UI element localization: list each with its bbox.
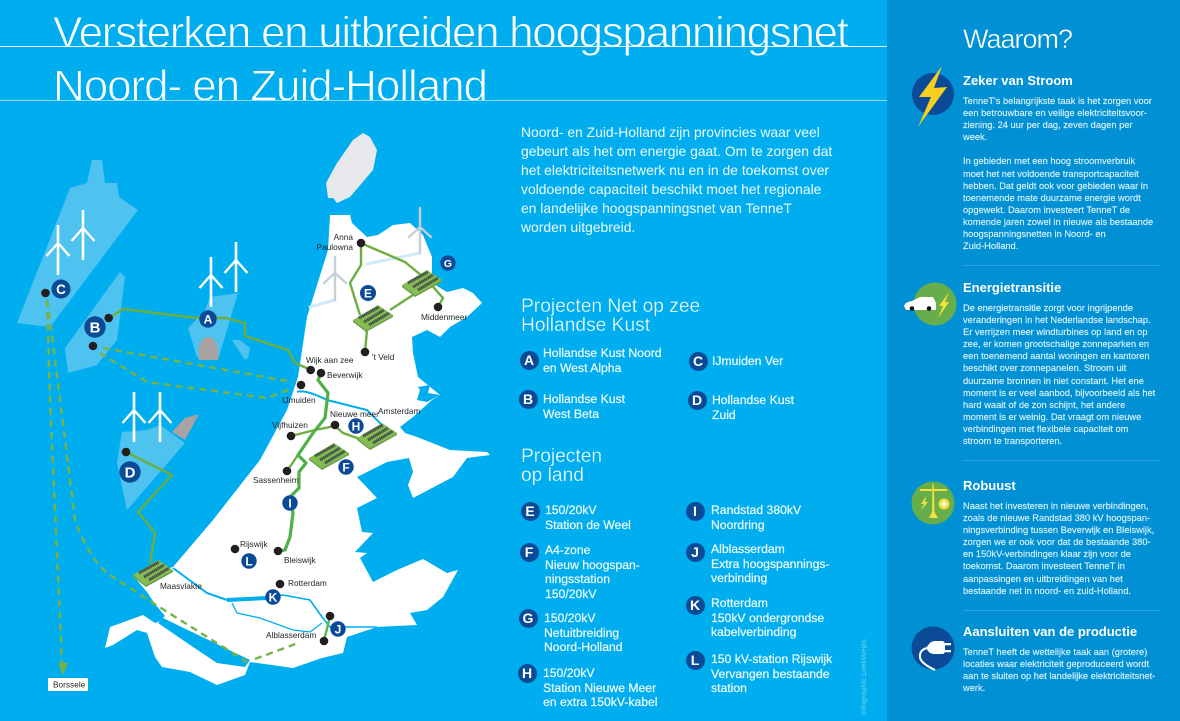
legend: land projects: Alblasserdam	[711, 542, 785, 556]
legend: land projects: Rotterdam	[711, 596, 768, 610]
legend: offshore projects: D	[692, 392, 702, 408]
text: aan te sluiten op het landelijke elektriciteitsnet-	[963, 671, 1155, 681]
text: verbindingen met flexibele capaciteit om	[963, 424, 1128, 434]
reserved grey zones	[172, 337, 218, 440]
map place labels: IJmuiden	[282, 395, 316, 405]
icon: car	[904, 282, 956, 326]
legend: offshore projects: B	[523, 390, 533, 406]
map place labels: Nieuwe meer	[330, 409, 379, 419]
text: hebben. Dat geldt ook voor gebieden waar in	[963, 181, 1148, 191]
heading: projecten net op zee	[521, 296, 700, 336]
legend: offshore projects: Hollandse Kust Noord	[543, 346, 662, 360]
legend: offshore projects: A	[524, 352, 534, 368]
island: Texel	[326, 133, 377, 203]
text: stroom te transporteren.	[963, 436, 1062, 446]
map place labels: 't Veld	[372, 352, 395, 362]
map place labels: Rotterdam	[288, 578, 327, 588]
map place labels	[160, 232, 467, 640]
map place labels: Beverwijk	[327, 370, 363, 380]
text: Energietransitie	[963, 280, 1061, 295]
map badges: D	[125, 464, 136, 482]
water: lake and estuary	[158, 385, 440, 667]
text: Zuid-Holland.	[963, 241, 1018, 251]
legend: offshore projects: West Beta	[543, 406, 599, 420]
map badges: F	[342, 460, 350, 474]
intro text: en landelijke hoogspanningsnet van TenneT	[521, 200, 792, 216]
map place labels: Sassenheim	[253, 475, 299, 485]
legend: land projects: 150 kV-station Rijswijk	[711, 652, 832, 666]
legend: offshore projects: IJmuiden Ver	[712, 354, 783, 368]
section: zeker van stroom	[962, 73, 1153, 251]
intro text: het elektriciteitsnetwerk nu en in de toekomst over	[521, 162, 829, 178]
legend: land projects: Randstad 380kV	[711, 503, 801, 517]
map badges: I	[288, 496, 292, 510]
map place labels: Rijswijk	[240, 539, 269, 549]
intro text: voldoende capaciteit beschikt moet het regionale	[521, 180, 821, 196]
text: moet het net voldoende transportcapaciteit	[963, 169, 1139, 179]
text: hard waait of de zon schijnt, het andere	[963, 400, 1125, 410]
text: aanpassingen en uitbreidingen van het	[963, 574, 1123, 584]
text: Zeker van Stroom	[963, 73, 1073, 88]
dashed cables	[47, 300, 298, 664]
map badges: A	[204, 312, 213, 326]
text: locaties waar elektriciteit geproduceerd wordt	[963, 659, 1149, 669]
text: opgewekt. Daarom investeert TenneT de	[963, 205, 1130, 215]
heading: waarom: Waarom?	[963, 24, 1072, 54]
map badges: K	[269, 590, 278, 604]
map badges: G	[444, 258, 452, 270]
text: hoogspanningsnetten in Noord- en	[963, 229, 1106, 239]
legend: land projects: Noordring	[711, 518, 765, 532]
legend: land projects: en extra 150kV-kabel	[543, 695, 658, 709]
map place labels: Middenmeer	[421, 312, 467, 322]
legend: land projects: Station de Weel	[545, 518, 631, 532]
label: Borssele: Borssele	[53, 680, 86, 690]
legend: land projects: Netuitbreiding	[544, 626, 619, 640]
text: veranderingen in het Nederlandse landschap.	[963, 315, 1151, 325]
legend: land projects: ningsstation	[545, 572, 610, 586]
map place labels: Anna	[334, 232, 353, 242]
legend: land projects: 150/20kV	[545, 503, 596, 517]
offshore zones	[17, 160, 250, 510]
text: TenneT's belangrijkste taak is het zorgen voor	[963, 96, 1152, 106]
legend: offshore projects: Hollandse Kust	[543, 392, 625, 406]
solid cables	[109, 243, 443, 641]
legend: land projects: kabelverbinding	[711, 625, 796, 639]
intro text: Noord- en Zuid-Holland zijn provincies waar veel	[521, 124, 820, 140]
heading: projecten net op zee: Hollandse Kust	[521, 315, 650, 336]
intro text: worden uitgebreid.	[521, 218, 635, 234]
map badges: J	[335, 622, 341, 636]
legend: offshore projects: Hollandse Kust	[712, 393, 794, 407]
text: bestaande net in noord- en zuid-Holland.	[963, 586, 1131, 596]
text: en 150kV-verbindingen klaar zijn voor de	[963, 549, 1131, 559]
legend: land projects: A4-zone	[545, 543, 590, 557]
legend: land projects: L	[691, 652, 699, 668]
map badges: H	[352, 420, 360, 434]
map place labels: Vijfhuizen	[272, 420, 308, 430]
text: moment is er veel aanbod, bijvoorbeeld als het	[963, 388, 1155, 398]
Randstad cable	[278, 373, 328, 551]
land-based turbines	[310, 208, 431, 307]
legend: land projects: G	[523, 610, 533, 626]
map badges: B	[90, 320, 101, 336]
legend: land projects: Vervangen bestaande	[711, 666, 830, 680]
legend: land projects: 150/20kV	[545, 586, 596, 600]
text: zorgen we er ook voor dat de bestaande 380-	[963, 537, 1151, 547]
panel: waarom background	[887, 0, 1180, 721]
text: Robuust	[963, 478, 1016, 493]
text: Naast het investeren in nieuwe verbindingen,	[963, 501, 1149, 511]
title: Noord- en Zuid-Holland	[53, 62, 488, 110]
heading: projecten net op zee: Projecten Net op zee	[521, 296, 700, 317]
heading: projecten op land: op land	[521, 465, 584, 486]
text: een betrouwbare en veilige elektriciteitsvoor-	[963, 108, 1147, 118]
heading: projecten op land	[521, 446, 602, 486]
legend: land projects: H	[522, 664, 532, 680]
text: De energietransitie zorgt voor ingrijpende	[963, 303, 1133, 313]
text: ziening. 24 uur per dag, zeven dagen per	[963, 120, 1133, 130]
map place labels: Bleiswijk	[284, 555, 317, 565]
arrow to Borssele	[58, 663, 68, 675]
map place labels: Maasvlakte	[160, 581, 202, 591]
legend: land projects: K	[690, 596, 700, 612]
legend: land projects: Noord-Holland	[544, 640, 623, 654]
text: toekomst. Daarom investeert TenneT in	[963, 561, 1125, 571]
water: rivers and canals	[173, 391, 382, 632]
section: robuust	[963, 478, 1154, 596]
text: zoals de nieuwe Randstad 380 kV hoogspan-	[963, 513, 1150, 523]
credit: Infographic LoekWeijts	[859, 639, 868, 715]
text: een toenemend aantal woningen en kantoren	[963, 351, 1150, 361]
text: duurzame bronnen in niet constant. Het ene	[963, 376, 1144, 386]
offshore turbines	[46, 210, 248, 442]
legend: offshore projects: C	[693, 352, 703, 368]
legend: land projects: verbinding	[711, 571, 767, 585]
map place labels: Alblasserdam	[266, 630, 316, 640]
legend: offshore projects: Zuid	[712, 408, 736, 422]
legend: land projects: I	[693, 502, 697, 518]
section: energietransitie	[962, 280, 1156, 446]
heading: projecten op land: Projecten	[521, 446, 602, 467]
text: TenneT heeft de wettelijke taak aan (grotere)	[963, 647, 1147, 657]
map badges: L	[245, 554, 253, 568]
text: komende jaren zowel in nieuwe als bestaande	[963, 217, 1153, 227]
text: beschikt over zonnepanelen. Stroom uit	[963, 363, 1126, 373]
land: Noord- en Zuid-Holland	[105, 215, 490, 685]
title: Versterken en uitbreiden hoogspanningsnet	[53, 8, 849, 57]
legend: land projects: 150/20kV	[543, 666, 594, 680]
map badges: C	[56, 282, 66, 297]
legend: land projects: F	[525, 544, 533, 560]
map	[17, 133, 490, 691]
map place labels: Wijk aan zee	[306, 355, 354, 365]
connection points	[41, 239, 442, 645]
text: moment is er weinig. Dat vraagt om nieuwe	[963, 412, 1141, 422]
legend: offshore projects: en West Alpha	[543, 360, 621, 374]
icon: lightning	[912, 66, 954, 127]
legend: land projects: Nieuw hoogspan-	[545, 558, 640, 572]
icon: robust pylon	[912, 482, 954, 524]
solar stations	[133, 270, 442, 587]
text: In gebieden met een hoog stroomverbruik	[963, 156, 1135, 166]
text: Er verrijzen meer windturbines op land en op	[963, 327, 1148, 337]
legend: land projects	[518, 502, 832, 709]
map badges	[52, 255, 456, 637]
legend: land projects: Extra hoogspannings-	[711, 556, 830, 570]
intro text	[521, 124, 832, 235]
icon: plug	[912, 626, 954, 671]
text: week.	[963, 132, 987, 142]
label: Borssele	[48, 678, 88, 691]
legend: land projects: 150kV ondergrondse	[711, 610, 824, 624]
legend: land projects: station	[711, 681, 747, 695]
title	[0, 8, 887, 110]
text: werk.	[963, 683, 985, 693]
text: toenemende mate duurzame energie wordt	[963, 193, 1141, 203]
legend: offshore projects	[519, 346, 794, 422]
text: ningsverbinding tussen Beverwijk en Bleiswijk,	[963, 525, 1154, 535]
section: aansluiten	[962, 624, 1155, 693]
text: zee, er komen grootschalige zonneparken en	[963, 339, 1149, 349]
legend: land projects: J	[691, 544, 699, 560]
map place labels: Amsterdam	[378, 406, 421, 416]
intro text: gebeurt als het om energie gaat. Om te zorgen dat	[521, 142, 832, 158]
legend: land projects: Station Nieuwe Meer	[543, 680, 656, 694]
map place labels: Paulowna	[317, 242, 353, 252]
legend: land projects: E	[525, 502, 535, 518]
text: Aansluiten van de productie	[963, 624, 1137, 639]
map badges: E	[364, 286, 372, 300]
legend: land projects: 150/20kV	[544, 611, 596, 625]
